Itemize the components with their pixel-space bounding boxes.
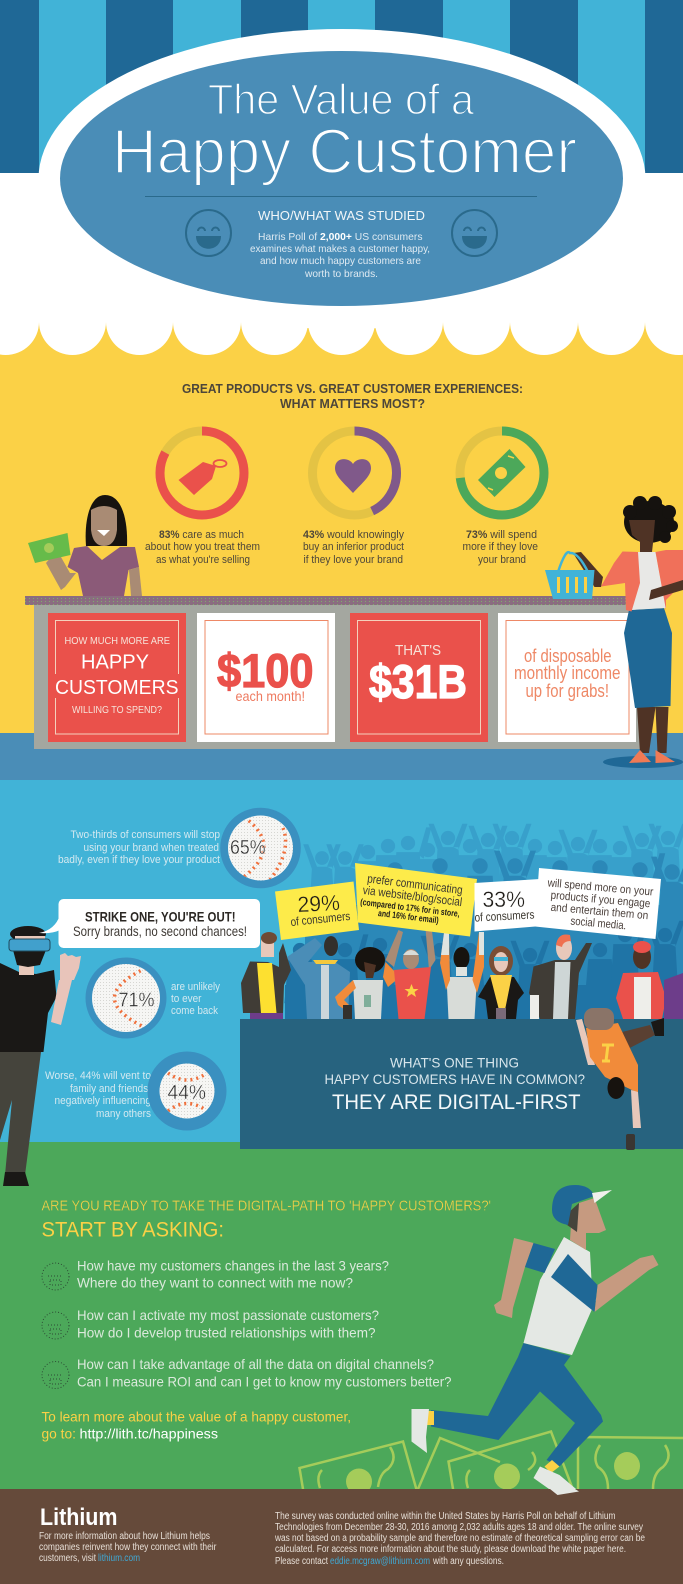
illustration: money bills on the ground: [300, 1432, 683, 1495]
heading: digital path question: ARE YOU READY TO TAKE THE DIGITAL-PATH TO 'HAPPY CUSTOMERS?': [42, 1198, 491, 1214]
icon: left smiley: [186, 210, 231, 256]
chart: 71% baseball: [86, 958, 166, 1038]
panel: disposable income box: up for grabs!: [526, 681, 609, 701]
text: vent to family and friends: negatively influencing: [54, 1095, 151, 1107]
panel: floor: [0, 733, 683, 780]
text: 43% statistic: 43% would knowingly: [303, 529, 404, 541]
text block: question 1: How have my customers changes in the last 3 years?: [77, 1258, 389, 1274]
text: 73% statistic: your brand: [478, 554, 526, 566]
panel: $100 box: each month!: [236, 688, 305, 704]
sign: prefer communicating: via website/blog/social: [362, 883, 463, 909]
text block: question 1: [77, 1258, 389, 1290]
heading: great products vs experiences: WHAT MATTERS MOST?: [280, 396, 425, 411]
panel: $31B box: [350, 613, 488, 742]
sign: will spend more: will spend more on your: [546, 877, 654, 899]
panel: digital-first box: HAPPY CUSTOMERS HAVE IN COMMON?: [324, 1071, 585, 1087]
text block: study description: Harris Poll of 2,000+ US consumers: [258, 231, 422, 243]
illustration: crowd man in red star shirt: [386, 923, 436, 1019]
text block: study description: [250, 231, 430, 280]
panel: how much more box: CUSTOMERS: [55, 676, 178, 699]
sign: prefer communicating: [355, 863, 477, 936]
text: unlikely to come back: come back: [171, 1005, 218, 1017]
text: learn more call to action: [42, 1408, 351, 1442]
title: The Value of a: [208, 76, 474, 124]
panel: disposable income box: of disposable: [524, 646, 612, 666]
sign: 33% of consumers: [474, 879, 540, 932]
chart: 43% ring with heart icon: [312, 431, 396, 515]
text: 83% statistic: [145, 529, 260, 566]
panel: $100 box: [197, 613, 335, 742]
sign: prefer communicating: (compared to 17% for in store,: [360, 897, 460, 919]
panel: page background white: [0, 0, 683, 360]
panel: striped awning: [0, 0, 683, 173]
title: Happy Customer: [112, 117, 577, 187]
sign: prefer communicating: prefer communicating: [366, 871, 463, 897]
panel: $100 box: $100: [217, 644, 314, 697]
illustration: crowd person in black jacket: [241, 932, 291, 1019]
panel: disposable income box: monthly income: [514, 663, 620, 683]
heading: great products vs experiences: [182, 381, 523, 411]
text: 83% statistic: about how you treat them: [145, 541, 260, 553]
chart: 44% baseball: [148, 1052, 226, 1130]
text: vent to family and friends: Worse, 44% will vent to: [45, 1070, 151, 1082]
text block: about Lithium: [39, 1531, 217, 1564]
panel: how much more box: [48, 613, 186, 742]
text: 73% statistic: 73% will spend: [466, 529, 537, 541]
scalloped awning edge: [0, 322, 683, 355]
sign: 33% of consumers: 33%: [482, 887, 525, 912]
heading: great products vs experiences: GREAT PRODUCTS VS. GREAT CUSTOMER EXPERIENCES:: [182, 381, 523, 396]
icon: right smiley: [452, 210, 497, 256]
text: vent to family and friends: [45, 1070, 151, 1120]
icon: dotted smiley 2: [42, 1312, 69, 1339]
illustration: crowd person from behind: [440, 932, 484, 1019]
text block: about Lithium: For more information about how Lithium helps: [39, 1531, 210, 1542]
text: two-thirds statement: [58, 829, 220, 866]
callout: strike one: Sorry brands, no second chances!: [73, 923, 247, 939]
text block: about Lithium: lithium.com: [98, 1553, 140, 1564]
sign: will spend more: [535, 868, 661, 939]
text block: question 2: How can I activate my most passionate customers?: [77, 1307, 379, 1323]
illustration: runner front shoe over footer: [550, 1489, 579, 1495]
text: vent to family and friends: many others: [96, 1108, 151, 1120]
text block: question 2: [77, 1307, 379, 1340]
text: 83% statistic: as what you're selling: [156, 554, 250, 566]
illustration: crowd woman in orange: [335, 947, 400, 1019]
text: 73% statistic: more if they love: [462, 541, 538, 553]
panel: yellow store section: [0, 322, 683, 733]
text: two-thirds statement: using your brand when treated: [84, 842, 219, 854]
text block: question 3: Can I measure ROI and can I get to know my customers better?: [77, 1374, 452, 1390]
text: 43% statistic: buy an inferior product: [303, 541, 404, 553]
text block: question 3: How can I take advantage of all the data on digital channels?: [77, 1356, 434, 1372]
sign: 29% of consumers: 29%: [297, 890, 341, 917]
text: vent to family and friends: family and friends,: [70, 1083, 151, 1095]
text: unlikely to come back: are unlikely: [171, 981, 220, 993]
heading: who/what was studied: WHO/WHAT WAS STUDIED: [258, 209, 425, 223]
text: two-thirds statement: Two-thirds of consumers will stop: [70, 829, 220, 841]
panel: green field: [0, 1142, 683, 1489]
icon: dotted smiley 3: [42, 1362, 69, 1388]
text: 43% statistic: if they love your brand: [304, 554, 403, 566]
text block: question 2: How do I develop trusted relationships with them?: [77, 1324, 376, 1340]
illustration: shopper woman with basket: [545, 496, 683, 768]
chart: 83% ring with tag icon: [160, 431, 244, 515]
illustration: crowd man in red jacket and cap: [616, 941, 666, 1019]
text block: study description: worth to brands.: [304, 268, 378, 280]
text: unlikely to come back: [171, 981, 220, 1017]
panel: how much more box: HAPPY: [81, 650, 149, 674]
text: learn more call to action: http://lith.tc/happiness: [80, 1426, 218, 1442]
panel: how much more box: WILLING TO SPEND?: [72, 705, 162, 716]
text block: survey methodology: The survey was conducted online within the United States by Harris Poll on behalf of Lithium: [275, 1511, 616, 1522]
chart: 65% baseball: [220, 808, 301, 888]
panel: how much more box: HOW MUCH MORE ARE: [64, 636, 170, 647]
illustration: running man: [412, 1185, 658, 1495]
chart: 65% baseball: 65%: [230, 837, 266, 859]
sign: will spend more: social media.: [570, 916, 627, 932]
illustration: crowd person in blue hoodie: [287, 936, 350, 1019]
text block: study description: and how much happy customers are: [260, 255, 421, 267]
chart: 71% baseball: 71%: [118, 990, 155, 1012]
sign: 33% of consumers: of consumers: [474, 907, 535, 925]
sign: 29% of consumers: of consumers: [290, 909, 351, 929]
sign: prefer communicating: and 16% for email): [378, 908, 439, 925]
sign: 29% of consumers: [275, 882, 359, 940]
illustration: crowd person in purple: [664, 973, 683, 1019]
panel: header white oval: [38, 29, 646, 329]
text block: question 1: Where do they want to connect with me now?: [77, 1274, 353, 1290]
text block: survey methodology: Please contact: [275, 1556, 328, 1567]
sign: will spend more: products if you engage: [550, 890, 651, 910]
panel: checkout counter: [25, 596, 640, 749]
heading: start by asking: START BY ASKING:: [42, 1218, 224, 1242]
illustration: background crowd silhouettes: [284, 824, 683, 1019]
illustration: crowd man in dark jacket: [529, 934, 592, 1020]
illustration: cashier woman holding money: [28, 495, 142, 596]
panel: digital-first box: WHAT'S ONE THING: [390, 1054, 519, 1070]
text: 43% statistic: [303, 529, 404, 566]
icon: dotted smiley 1: [42, 1263, 69, 1290]
icon: shopping basket: [545, 552, 594, 599]
text: learn more call to action: To learn more about the value of a happy customer,: [42, 1408, 351, 1424]
panel: digital-first box: [240, 1019, 683, 1149]
text: unlikely to come back: to ever: [171, 993, 202, 1005]
callout: strike one: STRIKE ONE, YOU'RE OUT!: [85, 908, 236, 924]
panel: $31B box: $31B: [369, 655, 467, 708]
illustration: umpire man with raised fist: [0, 926, 81, 1186]
panel: $31B box: THAT'S: [395, 642, 441, 659]
sign: will spend more: and entertain them on: [550, 902, 649, 922]
logo: Lithium: Lithium: [40, 1504, 118, 1531]
panel: header blue oval: [60, 51, 623, 306]
text: learn more call to action: go to:: [42, 1426, 76, 1442]
panel: sky blue section: [0, 780, 683, 1142]
panel: disposable income box: [498, 613, 636, 742]
callout: strike one: [39, 899, 260, 948]
chart: 73% ring with money icon: [460, 431, 544, 515]
title: [112, 76, 577, 187]
text block: question 3: [77, 1356, 452, 1390]
text block: survey methodology: with any questions.: [432, 1556, 504, 1567]
text block: about Lithium: customers, visit: [39, 1553, 96, 1564]
illustration: falling person in orange hoodie: [576, 1008, 664, 1150]
text block: survey methodology: eddie.mcgraw@lithium.com: [330, 1556, 430, 1567]
text: two-thirds statement: badly, even if they love your product: [58, 854, 220, 866]
text block: about Lithium: companies reinvent how they connect with their: [39, 1542, 217, 1553]
panel: brown footer: [0, 1489, 683, 1584]
text block: study description: examines what makes a customer happy,: [250, 243, 430, 255]
text block: survey methodology: [274, 1511, 645, 1567]
text: 83% statistic: 83% care as much: [159, 529, 244, 541]
panel: digital-first box: THEY ARE DIGITAL-FIRST: [332, 1091, 581, 1114]
illustration: crowd woman with yellow scarf: [478, 946, 524, 1020]
text: 73% statistic: [462, 529, 538, 566]
chart: 44% baseball: 44%: [168, 1082, 206, 1104]
